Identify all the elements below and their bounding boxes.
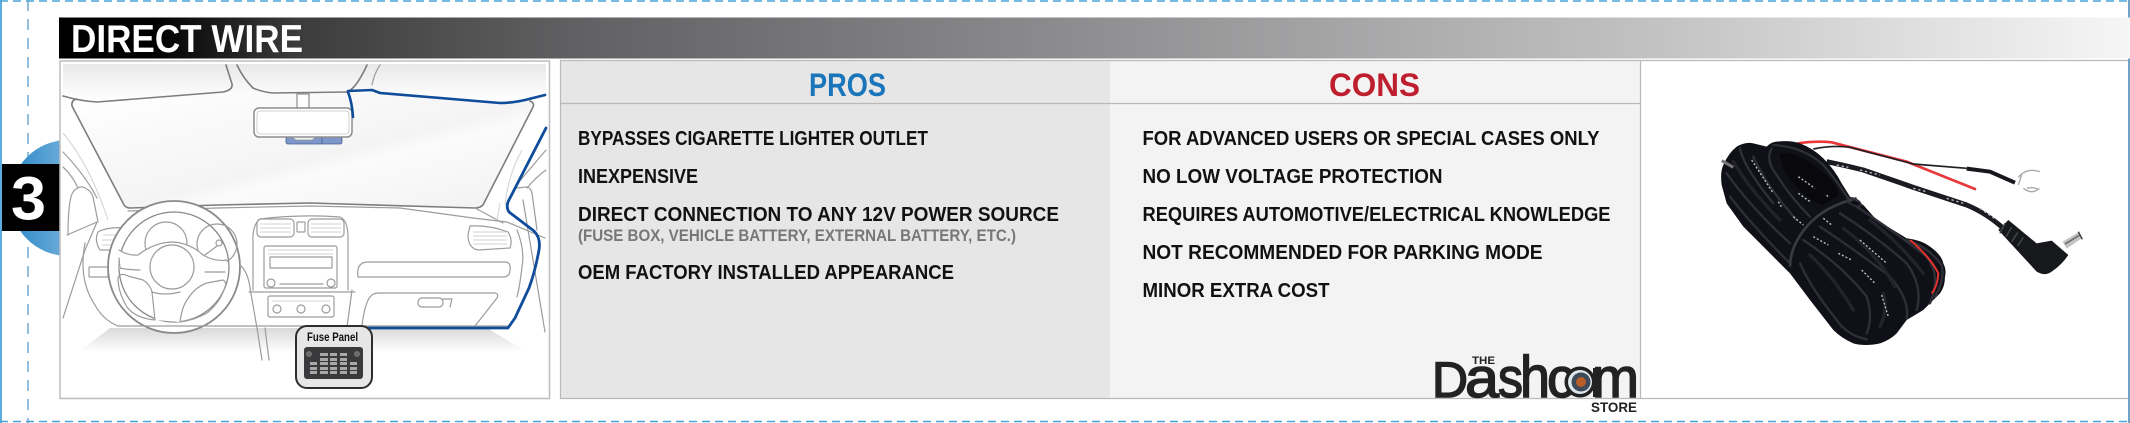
rearview mirror with dash camera: [254, 94, 352, 144]
dark centre of the upper loop: [1780, 153, 1838, 205]
icon: camera lens: [1564, 366, 1596, 398]
leads and plug: [1798, 142, 2082, 274]
logo: The Dashcam Store: THE: [1472, 355, 1495, 367]
title bar: [59, 18, 2130, 61]
passenger dash: vent and glove box: [358, 226, 523, 326]
cons list: NO LOW VOLTAGE PROTECTION: [1142, 165, 1442, 188]
red lead: [1798, 142, 1975, 189]
panel rules: [560, 60, 2128, 398]
pros list: OEM FACTORY INSTALLED APPEARANCE: [578, 261, 954, 284]
cons list: REQUIRES AUTOMOTIVE/ELECTRICAL KNOWLEDGE: [1142, 203, 1610, 226]
logo: The Dashcam Store: [1432, 345, 1639, 415]
logo: The Dashcam Store: h: [1520, 345, 1550, 410]
cable markings on lead: [1837, 165, 1997, 220]
pros heading: PROS: [809, 67, 886, 103]
red lead inside the coil: [1910, 240, 1938, 293]
cable tie: [1790, 198, 1857, 267]
logo: The Dashcam Store: D: [1432, 352, 1468, 408]
cons list: [1142, 127, 1610, 302]
cons heading: CONS: [1329, 67, 1420, 103]
logo: The Dashcam Store: c: [1547, 346, 1575, 409]
panel: car interior illustration: [60, 61, 550, 398]
coiled bundle: [1721, 141, 1946, 345]
ground lead with ring terminal: [1813, 146, 2040, 192]
logo: The Dashcam Store: s: [1498, 346, 1523, 409]
cons list: FOR ADVANCED USERS OR SPECIAL CASES ONLY: [1142, 127, 1600, 150]
step number badge: [2, 140, 60, 256]
logo: The Dashcam Store: STORE: [1591, 399, 1637, 415]
panel: pros: [560, 60, 1110, 398]
product photo: hardwire cable: [1721, 141, 2082, 345]
step number badge: 3: [11, 164, 46, 232]
fuse panel callout: Fuse Panel: [307, 332, 358, 344]
pros list: (FUSE BOX, VEHICLE BATTERY, EXTERNAL BATTERY, ETC.): [578, 226, 1016, 245]
blue power wire: [348, 90, 546, 328]
pros list: BYPASSES CIGARETTE LIGHTER OUTLET: [578, 127, 928, 150]
steering wheel and gauges: [83, 201, 240, 333]
logo: The Dashcam Store: m: [1592, 346, 1639, 409]
power cable and right-angle plug: [1827, 162, 2082, 274]
cable markings: [1752, 160, 1888, 317]
pros list: INEXPENSIVE: [578, 165, 698, 188]
cable strands: [1727, 145, 1942, 339]
windshield and pillars: [63, 65, 546, 332]
title bar: DIRECT WIRE: [71, 18, 303, 61]
pros list: DIRECT CONNECTION TO ANY 12V POWER SOURCE: [578, 203, 1059, 226]
cons list: MINOR EXTRA COST: [1142, 279, 1330, 302]
panel: cons: [1110, 60, 1640, 398]
pros list: [578, 127, 1059, 284]
logo: The Dashcam Store: a: [1465, 346, 1500, 409]
centre stack: vents, radio, climate controls: [118, 216, 508, 360]
cons list: NOT RECOMMENDED FOR PARKING MODE: [1142, 241, 1542, 264]
fuse panel callout: [296, 326, 372, 388]
loose cable end: [1722, 161, 1733, 167]
